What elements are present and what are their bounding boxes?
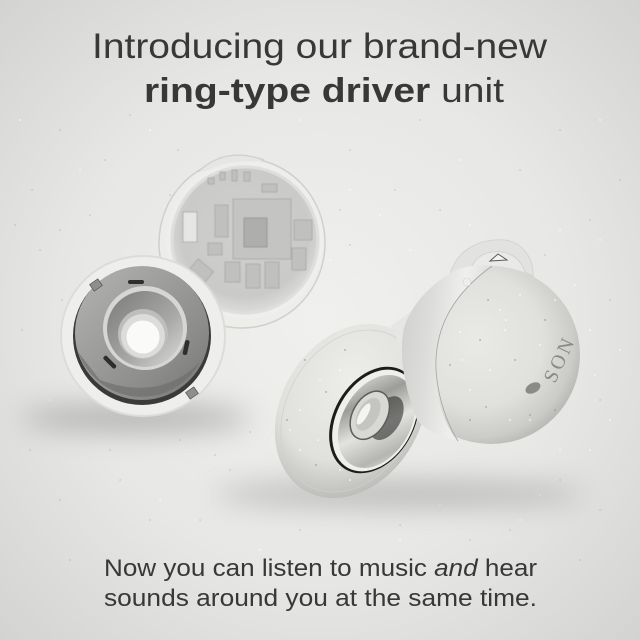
transparent earbud housing with circuit board (159, 155, 325, 328)
caption line 2: sounds around you at the same time. (104, 585, 537, 612)
circuit disc (172, 167, 318, 313)
shadow under exposed driver (20, 404, 250, 432)
rear disc (244, 296, 458, 526)
microphone hole (524, 380, 542, 396)
shadow under earbud (215, 481, 585, 507)
housing highlight (168, 163, 322, 317)
title line 2: ring-type driver unit (144, 72, 505, 110)
title (92, 27, 548, 110)
caption (104, 555, 537, 612)
side tabs (90, 279, 198, 399)
central hole (126, 320, 160, 354)
black driver rim (73, 267, 211, 405)
white ring (121, 314, 165, 358)
SONY logo: SON (540, 335, 579, 386)
chrome ring driver (311, 351, 437, 489)
earbud speckles (287, 295, 555, 480)
connector (391, 312, 418, 350)
background speckles (15, 100, 620, 560)
loop support (450, 240, 533, 276)
clear housing (159, 158, 325, 328)
band seam (436, 266, 492, 441)
clips (103, 280, 190, 369)
clear outer shell (61, 256, 225, 416)
inner cone (118, 309, 168, 359)
circuit components (183, 170, 312, 288)
title line 1: Introducing our brand-new (92, 27, 548, 66)
disc inner seam (253, 305, 449, 517)
band button (463, 278, 471, 286)
loop inner (490, 254, 507, 261)
caption line 1: Now you can listen to music and hear (104, 555, 537, 582)
white earbud (244, 240, 580, 526)
main ball (402, 266, 580, 444)
metal plate (75, 266, 209, 400)
exposed ring driver in clear housing (61, 256, 225, 416)
translucent band (402, 265, 492, 441)
inner ring (103, 286, 187, 370)
